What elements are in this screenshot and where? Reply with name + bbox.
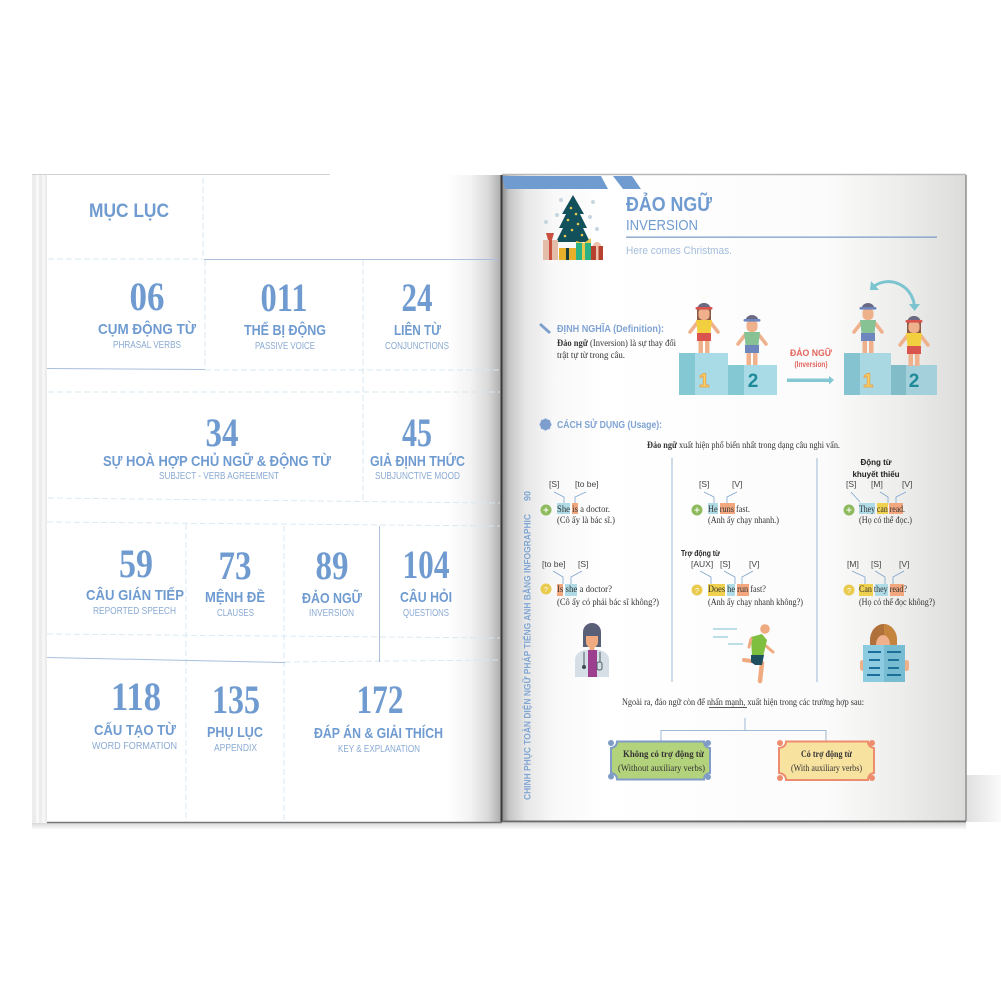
heading: inversion title: Here comes Christmas. — [626, 245, 732, 257]
spine title: CHINH PHỤC TOÀN DIỆN NGỮ PHÁP TIẾNG ANH BẰNG INFOGRAPHIC — [522, 514, 532, 800]
icon: christmas tree and gifts — [543, 195, 603, 260]
illustration: podium before inversion — [679, 303, 777, 395]
heading: inversion title — [626, 192, 937, 257]
page number: 90 — [522, 491, 532, 501]
example: he runs fast: He runs fast. — [708, 504, 750, 515]
definition text: Đảo ngữ (Inversion) là sự thay đổi — [557, 338, 676, 349]
entry: questions: CÂU HỎI — [400, 588, 452, 606]
background shadow under book — [32, 823, 966, 830]
entry: phrasal verbs: PHRASAL VERBS — [113, 340, 181, 351]
example: they can read: [V] — [902, 479, 912, 489]
arrow label: inversion: ĐẢO NGỮ — [790, 347, 832, 359]
entry: reported speech: 59 — [119, 541, 153, 586]
example: is she a doctor: Is she a doctor? — [557, 585, 612, 595]
entry: subject verb agreement: SUBJECT - VERB AGREEMENT — [159, 471, 279, 482]
example: does he run fast — [681, 549, 803, 608]
example: they can read — [844, 458, 912, 526]
example: is she a doctor: [to be] — [542, 559, 566, 569]
entry: key and explanation — [314, 677, 443, 755]
entry: subjunctive mood — [370, 410, 465, 482]
illustration: podium after inversion — [844, 303, 937, 395]
example: is she a doctor: [S] — [578, 559, 588, 569]
example: they can read: [M] — [871, 479, 883, 489]
panel: right page inversion lesson — [502, 175, 966, 822]
entry: inversion: 89 — [316, 543, 348, 588]
entry: questions: 104 — [402, 542, 450, 587]
example: does he run fast: [V] — [749, 559, 759, 569]
book edges — [32, 174, 966, 822]
entry: clauses — [205, 543, 265, 619]
illustration: podium after inversion: 2 — [909, 371, 919, 392]
panel: left page table of contents — [32, 175, 502, 823]
icon: gear — [540, 418, 552, 430]
entry: conjunctions: 24 — [402, 275, 432, 320]
heading: inversion title: ĐẢO NGỮ — [626, 192, 712, 216]
example: does he run fast: ? — [695, 588, 699, 595]
entry: conjunctions: LIÊN TỪ — [394, 321, 441, 339]
illustration: podium before inversion: 1 — [699, 371, 710, 392]
entry: appendix — [207, 677, 263, 754]
definition text: ĐỊNH NGHĨA (Definition): — [557, 322, 664, 335]
arrow: swap curve — [870, 281, 920, 311]
example: she is a doctor — [540, 479, 615, 526]
illustration: podium before inversion: 2 — [748, 371, 758, 392]
entry: word formation: CẤU TẠO TỪ — [94, 721, 176, 739]
definition text: trật tự từ trong câu. — [557, 351, 625, 361]
box: with auxiliary verbs: (With auxiliary verbs) — [791, 763, 862, 774]
example: can they read: [S] — [871, 559, 881, 569]
entry: subjunctive mood: 45 — [402, 410, 432, 455]
example: does he run fast: (Anh ấy chạy nhanh không?) — [708, 597, 803, 608]
entry: appendix: PHỤ LỤC — [207, 724, 263, 741]
entry: word formation — [92, 674, 177, 752]
example: they can read: Động từ — [860, 458, 892, 467]
ribbon: top corner — [502, 176, 641, 189]
page edge stack — [32, 175, 48, 823]
icon: runner — [713, 624, 773, 681]
example: does he run fast: [AUX] — [691, 559, 713, 569]
entry: subject verb agreement: SỰ HOÀ HỢP CHỦ NGỮ & ĐỘNG TỪ — [103, 452, 331, 470]
example: they can read: [S] — [846, 479, 856, 489]
right page sheet — [502, 175, 966, 822]
entry: passive voice: THỂ BỊ ĐỘNG — [244, 321, 326, 339]
entry: reported speech: CÂU GIÁN TIẾP — [86, 586, 184, 604]
box: without auxiliary verbs: Không có trợ động từ — [623, 750, 704, 760]
entry: inversion: INVERSION — [309, 608, 354, 619]
icon: person reading — [860, 624, 909, 682]
example: can they read: (Họ có thể đọc không?) — [859, 597, 935, 608]
entry: passive voice: 011 — [260, 275, 308, 320]
box: with auxiliary verbs: Có trợ động từ — [801, 750, 852, 760]
example: does he run fast: Trợ động từ — [681, 549, 720, 558]
entry: clauses: MỆNH ĐỀ — [205, 588, 265, 606]
entry: appendix: 135 — [212, 677, 260, 722]
grid lines — [47, 178, 500, 822]
illustration: podium after inversion: 1 — [863, 371, 874, 392]
entry: subjunctive mood: GIẢ ĐỊNH THỨC — [370, 452, 465, 470]
entry: key and explanation: 172 — [356, 677, 404, 722]
example: they can read: khuyết thiếu — [852, 470, 900, 479]
entry: clauses: CLAUSES — [217, 608, 254, 619]
entry: clauses: 73 — [218, 543, 252, 588]
entry: word formation: 118 — [111, 674, 161, 719]
example: she is a doctor: (Cô ấy là bác sĩ.) — [557, 515, 615, 526]
example: can they read: [V] — [899, 559, 909, 569]
arrow label: inversion: (Inversion) — [794, 360, 828, 369]
intro sentence: Đảo ngữ xuất hiện phổ biến nhất trong dạng câu nghi vấn. — [647, 440, 840, 451]
background shadow under right page — [966, 775, 1001, 822]
entry: key and explanation: KEY & EXPLANATION — [338, 744, 420, 755]
entry: passive voice — [244, 275, 326, 352]
left page sheet — [47, 175, 502, 822]
entry: inversion: ĐẢO NGỮ — [302, 589, 362, 607]
entry: subject verb agreement: 34 — [206, 410, 238, 455]
entry: reported speech — [86, 541, 184, 617]
example: does he run fast: Does he run fast? — [708, 584, 766, 595]
example: is she a doctor: (Cô ấy có phải bác sĩ không?) — [557, 597, 659, 608]
example: he runs fast: (Anh ấy chạy nhanh.) — [708, 515, 779, 526]
entry: questions — [400, 542, 452, 619]
example: he runs fast — [692, 479, 779, 526]
arrow label: inversion — [790, 347, 832, 369]
sentence: additional use: Ngoài ra, đảo ngữ còn để nhấn mạnh, xuất hiện trong các trường hợp sau: — [622, 697, 864, 708]
entry: phrasal verbs: 06 — [130, 274, 164, 319]
entry: conjunctions — [385, 275, 449, 352]
entry: subject verb agreement — [103, 410, 331, 482]
example: he runs fast: [S] — [699, 479, 709, 489]
entry: key and explanation: ĐÁP ÁN & GIẢI THÍCH — [314, 725, 443, 742]
example: is she a doctor: ? — [544, 587, 548, 594]
box: without auxiliary verbs: (Without auxiliary verbs) — [618, 763, 705, 774]
example: can they read: [M] — [847, 559, 859, 569]
example: he runs fast: [V] — [732, 479, 742, 489]
entry: passive voice: PASSIVE VOICE — [255, 341, 315, 352]
box: without auxiliary verbs — [608, 740, 711, 780]
connector tree — [661, 718, 826, 741]
entry: appendix: APPENDIX — [214, 743, 257, 754]
box: with auxiliary verbs — [777, 740, 875, 781]
entry: questions: QUESTIONS — [403, 608, 449, 619]
entry: reported speech: REPORTED SPEECH — [93, 606, 176, 617]
example: she is a doctor: [to be] — [575, 479, 599, 489]
example: she is a doctor: [S] — [549, 479, 559, 489]
arrow: transition — [787, 376, 834, 384]
entry: inversion — [302, 543, 362, 619]
example: can they read — [844, 559, 935, 608]
example: does he run fast: [S] — [720, 559, 730, 569]
example: they can read: (Họ có thể đọc.) — [859, 515, 912, 526]
example: is she a doctor — [540, 559, 659, 608]
entry: subjunctive mood: SUBJUNCTIVE MOOD — [375, 471, 460, 482]
example: can they read: ? — [847, 588, 851, 595]
entry: phrasal verbs — [98, 274, 196, 351]
icon: pencil — [539, 323, 551, 334]
heading: usage: CÁCH SỬ DỤNG (Usage): — [557, 418, 662, 431]
heading: inversion title: INVERSION — [626, 217, 698, 234]
example: they can read: They can read. — [859, 505, 905, 515]
example: she is a doctor: She is a doctor. — [557, 505, 610, 515]
entry: conjunctions: CONJUNCTIONS — [385, 341, 449, 352]
example: can they read: Can they read? — [859, 585, 907, 595]
definition text — [557, 322, 676, 361]
heading: contents: MỤC LỤC — [89, 201, 169, 222]
column dividers — [672, 458, 817, 682]
entry: word formation: WORD FORMATION — [92, 741, 177, 752]
entry: phrasal verbs: CỤM ĐỘNG TỪ — [98, 320, 196, 338]
icon: doctor — [575, 623, 609, 677]
